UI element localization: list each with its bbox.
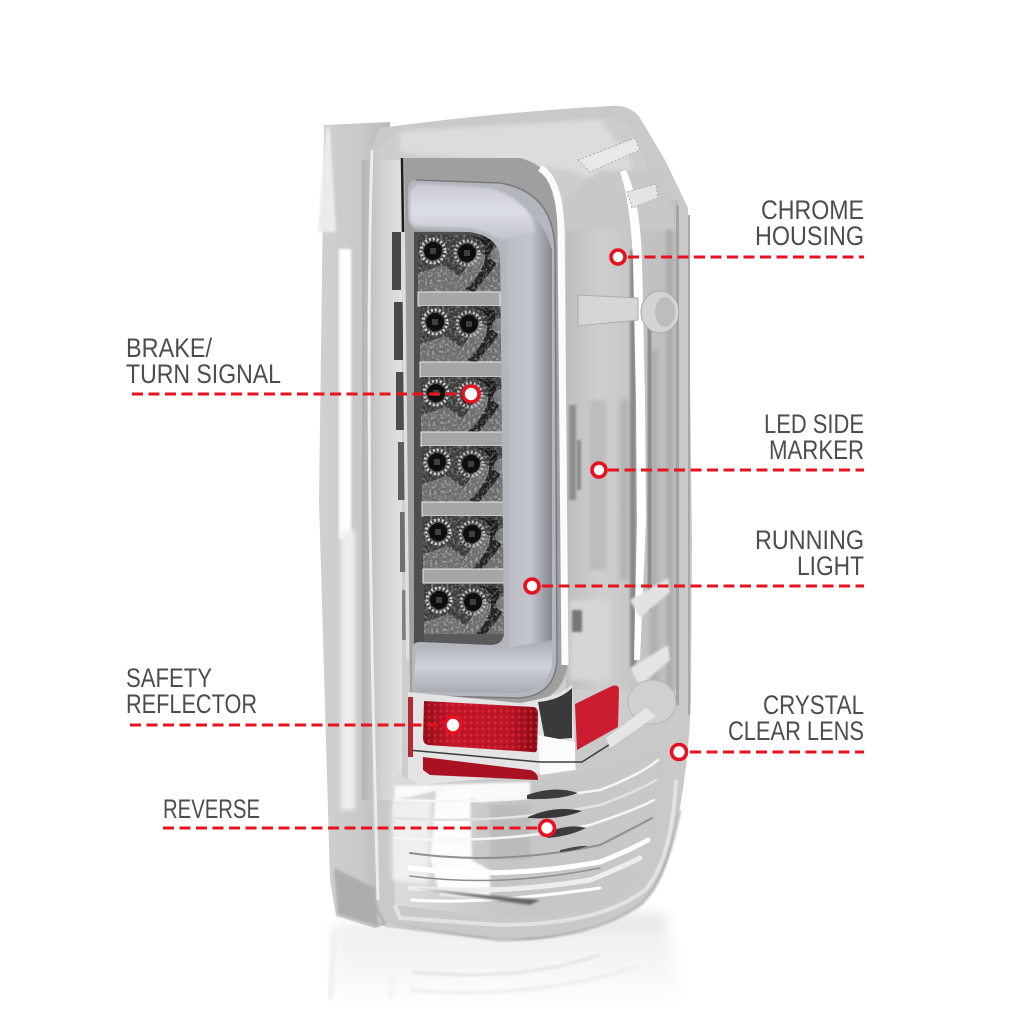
callout: LED side marker: [592, 409, 864, 477]
callout: reverse: [163, 794, 554, 836]
LED cell 6: [424, 584, 512, 641]
label: LED side marker: MARKER: [769, 435, 864, 465]
tail light assembly: [318, 106, 692, 940]
label: safety reflector: SAFETY: [126, 663, 212, 693]
side reflector: [575, 686, 656, 750]
label: chrome housing: HOUSING: [755, 221, 864, 251]
callout: brake turn signal: [126, 333, 479, 402]
label: crystal clear lens: CRYSTAL: [763, 690, 864, 720]
label: running light: LIGHT: [797, 551, 864, 581]
lower chrome surround: [408, 684, 640, 785]
outer lens rim: [395, 780, 676, 925]
label: running light: RUNNING: [755, 525, 864, 555]
LED cell 3: [421, 377, 509, 434]
label: chrome housing: CHROME: [761, 195, 864, 225]
divider bar 4: [422, 502, 506, 516]
floor reflection: [330, 915, 680, 1005]
callout: running light: [525, 525, 864, 593]
label: crystal clear lens: CLEAR LENS: [728, 716, 864, 746]
label: safety reflector: REFLECTOR: [126, 689, 257, 719]
lower reflector strip: [423, 757, 538, 780]
chrome bezel around light bar: [404, 158, 568, 705]
LED cell 1: [418, 235, 506, 292]
icon: side marker post: [578, 291, 679, 333]
reverse lens ribs: [395, 760, 658, 901]
LED cell 5: [423, 516, 511, 573]
icon: fluted lens detail top: [578, 138, 640, 172]
label: reverse: REVERSE: [163, 794, 260, 824]
label: LED side marker: LED SIDE: [764, 409, 864, 439]
divider bar 5: [423, 569, 507, 583]
callout: chrome housing: [611, 195, 864, 264]
safety reflector: [423, 701, 538, 752]
LED cell 2: [420, 306, 508, 363]
left inner window strips: [369, 150, 415, 900]
dark lens reflections: [527, 789, 578, 799]
left mounting flange: [318, 122, 390, 928]
callout: crystal clear lens: [672, 690, 864, 760]
main lens body: [362, 106, 692, 940]
crystal clear lens lower section: [375, 745, 680, 940]
LED cell 4: [422, 446, 510, 503]
label: brake turn signal: BRAKE/: [126, 333, 212, 363]
icon: fluted lens detail upper side: [627, 184, 658, 208]
callout: safety reflector: [126, 663, 461, 733]
LED brake and turn panel: [414, 232, 512, 652]
label: brake turn signal: TURN SIGNAL: [126, 359, 281, 389]
divider bar 1: [418, 292, 500, 306]
divider bar 2: [420, 362, 503, 377]
white reverse facets: [395, 782, 530, 802]
running light tube: [408, 180, 557, 698]
divider bar 3: [421, 432, 505, 446]
chrome housing interior: [362, 118, 690, 800]
